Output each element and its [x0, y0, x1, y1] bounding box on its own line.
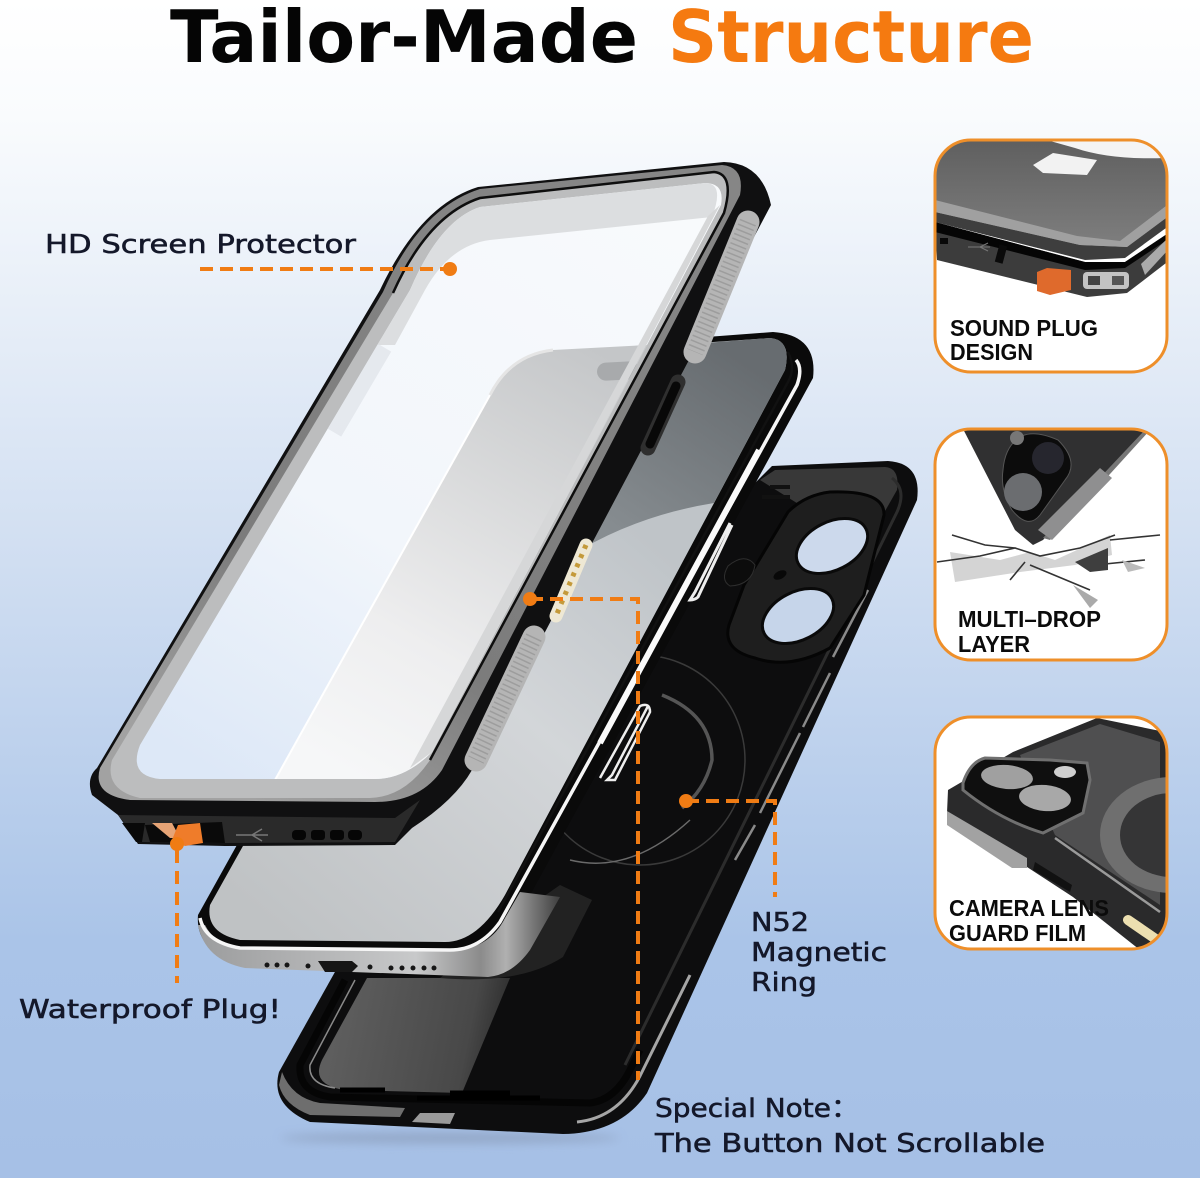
side button slots [690, 523, 732, 600]
card: camera lens guard film: CAMERA LENS [949, 895, 1109, 921]
bottom ports [118, 800, 420, 843]
callout: N52 magnetic ring: Magnetic [751, 938, 887, 968]
card: sound plug design [935, 139, 1170, 372]
callout: HD screen protector: HD Screen Protector [45, 230, 356, 260]
callout: special note: The Button Not Scrollable [654, 1129, 1045, 1159]
card: multi-drop layer: LAYER [958, 631, 1030, 657]
card: sound plug design: SOUND PLUG [950, 315, 1098, 341]
screen protector window [120, 170, 740, 790]
camera island [724, 492, 884, 662]
title [170, 0, 1034, 79]
pogo connector [556, 545, 586, 616]
callout: special note [523, 592, 1045, 1159]
bottom port holes [264, 961, 436, 972]
callout: waterproof plug [19, 837, 281, 1025]
magnetic ring [535, 655, 745, 865]
callout: N52 magnetic ring: Ring [751, 968, 817, 998]
side button [648, 382, 678, 448]
card: multi-drop layer [935, 425, 1167, 660]
card: camera lens guard film: GUARD FILM [949, 920, 1086, 946]
card: multi-drop layer: MULTI–DROP [958, 606, 1101, 632]
callout: waterproof plug: Waterproof Plug! [19, 995, 281, 1025]
case inner top [760, 467, 898, 520]
callout: N52 magnetic ring [679, 794, 887, 998]
callout: special note: Special Note： [655, 1094, 859, 1124]
callout: HD screen protector [45, 230, 457, 276]
back glass panel [319, 978, 510, 1093]
side pads [695, 222, 748, 352]
front frame [90, 162, 771, 846]
card: sound plug design: DESIGN [950, 339, 1033, 365]
callout: N52 magnetic ring: N52 [751, 908, 809, 938]
case shadow [280, 1133, 620, 1143]
shiny lower rim [279, 1072, 405, 1117]
back case [277, 461, 918, 1134]
middle phone [198, 332, 814, 979]
card: camera lens guard film [934, 716, 1168, 950]
